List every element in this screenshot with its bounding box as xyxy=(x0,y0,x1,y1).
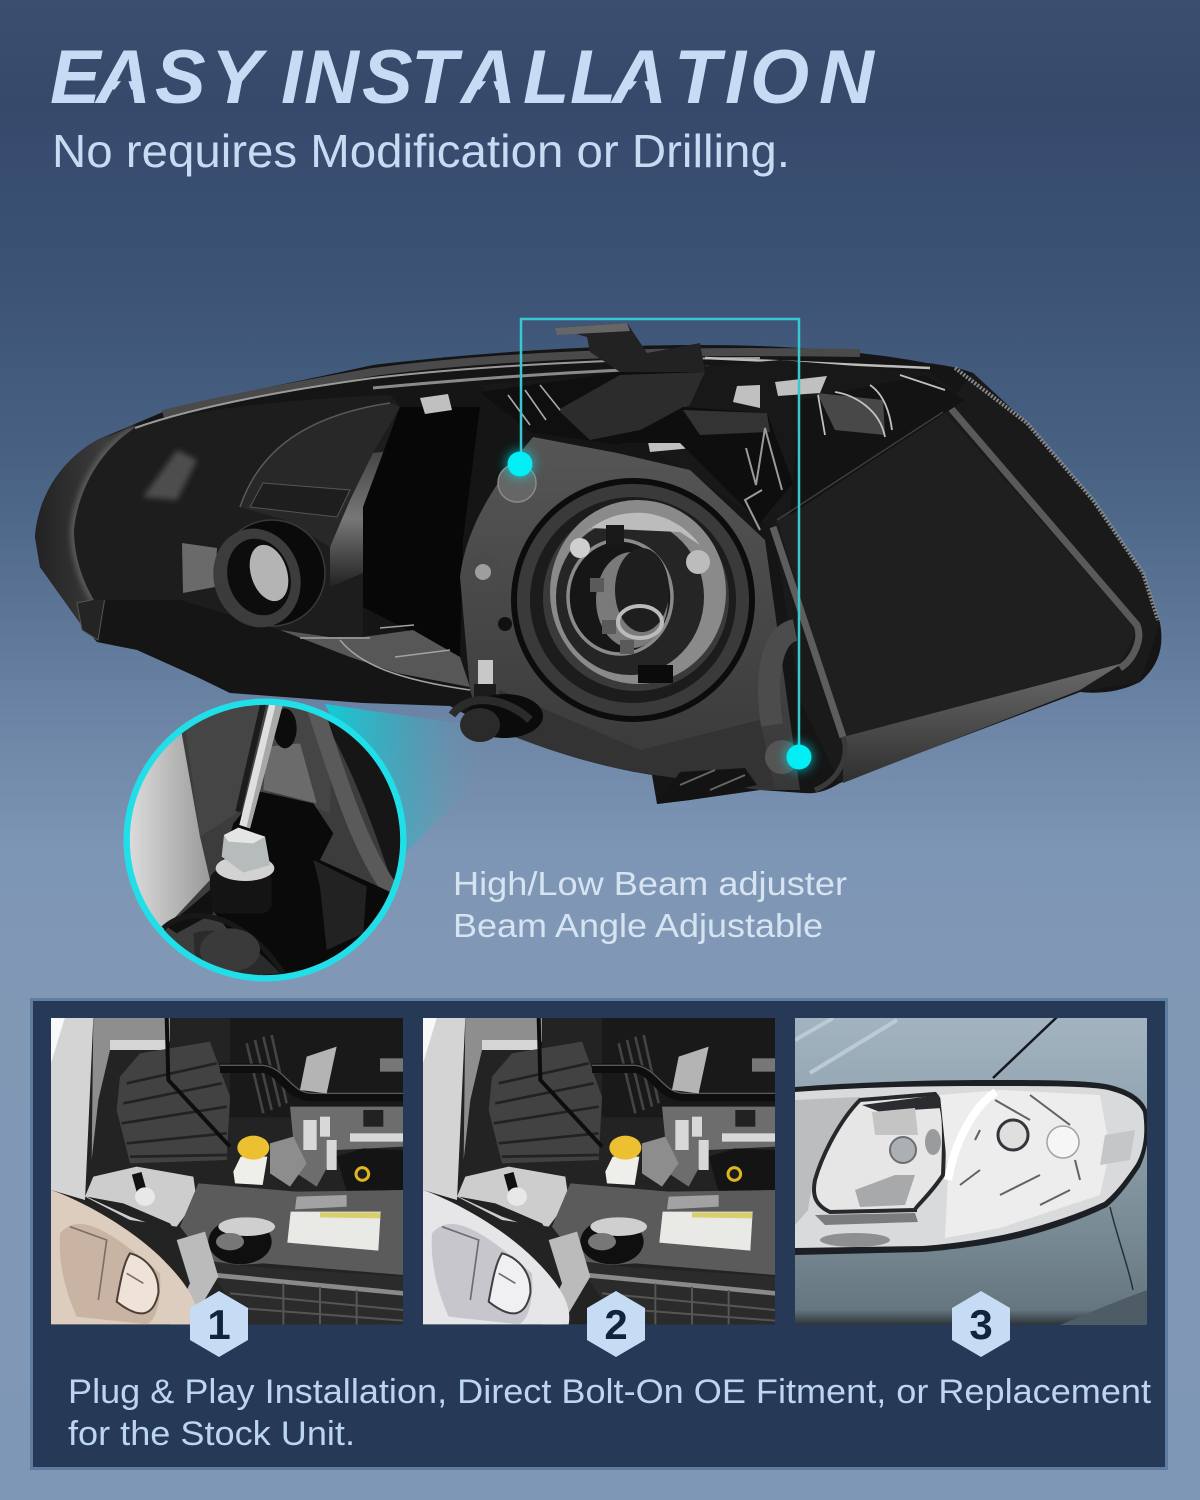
bottom mounting clip xyxy=(657,768,757,804)
left bulb socket xyxy=(182,517,325,639)
headlight silhouette xyxy=(35,345,1161,804)
chrome clips xyxy=(420,376,827,452)
plate bolts xyxy=(464,464,536,631)
subtitle: No requires Modification or Drilling. xyxy=(52,125,790,177)
title: EASY INSTALLATION xyxy=(50,35,876,120)
lower mounting bolt xyxy=(765,740,799,774)
lamp mounting plate xyxy=(460,437,800,790)
step 3 badge: 3 xyxy=(969,1301,993,1348)
panel: installation steps xyxy=(32,1000,1166,1468)
adjuster marker dot bottom xyxy=(784,742,814,772)
step 1 photo: engine bay with old headlight xyxy=(51,1017,403,1324)
step 2 badge xyxy=(587,1291,645,1357)
adjuster caption: High/Low Beam adjuster xyxy=(453,865,847,902)
step 2 badge: 2 xyxy=(604,1301,628,1348)
callout wedge connecting zoom circle to headlight xyxy=(325,704,490,858)
rib fins top left of plate xyxy=(508,385,560,425)
left dome of housing xyxy=(35,395,480,690)
adjuster caption: Beam Angle Adjustable xyxy=(453,907,823,944)
step 1 badge xyxy=(190,1291,248,1357)
step 2 photo: engine bay with new headlight xyxy=(423,1017,775,1324)
adjuster marker dot top xyxy=(505,449,535,479)
mounting tab top xyxy=(555,323,705,372)
step 3 photo: installed headlight on car xyxy=(795,1017,1148,1325)
lower plate xyxy=(490,690,775,790)
rubber vent tube xyxy=(769,630,795,725)
right dark panel xyxy=(773,368,1160,790)
top rim xyxy=(135,352,930,428)
zoom circle: screwdriver adjusting beam xyxy=(123,700,433,980)
adjuster caption xyxy=(453,865,847,944)
installation description text: Plug & Play Installation, Direct Bolt-On OE Fitment, or Replacement xyxy=(68,1373,1152,1411)
installation description text xyxy=(68,1373,1152,1453)
top center housing xyxy=(480,360,1000,560)
step 3 badge xyxy=(952,1291,1010,1357)
step 1 badge: 1 xyxy=(207,1301,231,1348)
black bracket block xyxy=(617,407,793,530)
bottom adjuster bolt xyxy=(452,660,543,742)
installation description text: for the Stock Unit. xyxy=(68,1415,355,1453)
lamp ring assembly xyxy=(511,478,755,722)
headlight product xyxy=(35,323,1161,804)
teal leader lines xyxy=(521,319,799,750)
